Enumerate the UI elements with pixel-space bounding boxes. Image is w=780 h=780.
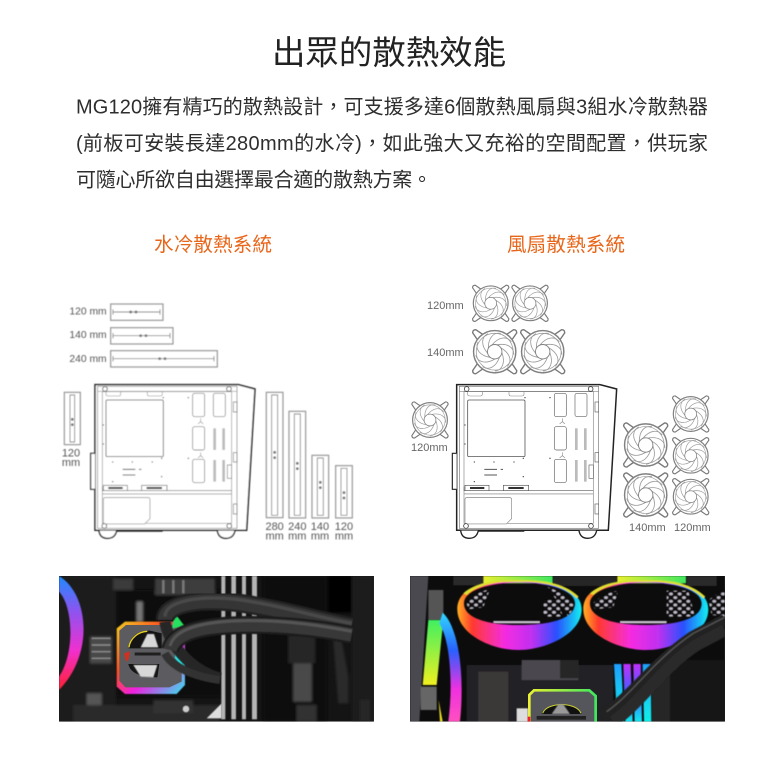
radiator size labels: 240 mm	[69, 354, 107, 365]
fan size labels: 120mm	[427, 300, 464, 312]
radiator size labels: 280	[265, 521, 284, 533]
chassis and motherboard background	[410, 576, 725, 722]
right fan hex mesh	[593, 591, 695, 623]
fans: 140mm front	[624, 423, 668, 517]
right RGB fan ring	[583, 576, 708, 650]
radiator size labels: 120 mm	[69, 307, 107, 318]
left RGB fan ring	[59, 576, 84, 690]
fans: 120mm top	[473, 285, 548, 321]
fan size labels: 140mm	[629, 522, 666, 534]
radiator size labels: mm	[311, 530, 329, 542]
fan size labels: 120mm	[411, 442, 448, 454]
left RGB fan ring	[457, 576, 582, 650]
radiators: side and front mount	[64, 392, 352, 518]
case outline: liquid cooling	[91, 385, 255, 538]
intro paragraph	[76, 96, 708, 192]
photo: liquid cooler pump block	[59, 576, 374, 722]
radiator size labels: 120	[62, 448, 80, 460]
radiator size labels: mm	[288, 530, 306, 542]
radiator sizes: top mount	[64, 304, 352, 518]
radiator size labels: mm	[335, 530, 353, 542]
motherboard background	[59, 576, 374, 722]
left fan hex mesh	[467, 587, 575, 623]
photo: RGB fans and pump	[410, 576, 725, 722]
heading: fan cooling: 風扇散熱系統	[507, 234, 625, 256]
diagram: liquid cooling layout	[62, 304, 353, 542]
radiator size labels: 120	[335, 521, 353, 533]
radiator size labels: mm	[265, 530, 284, 542]
RAM RGB sticks	[614, 664, 651, 722]
fans: 120mm front	[673, 396, 709, 515]
radiator size labels: 240	[288, 521, 306, 533]
radiator size labels: 140	[311, 521, 329, 533]
intro paragraph: (前板可安裝長達280mm的水冷)，如此強大又充裕的空間配置，供玩家	[76, 132, 708, 155]
radiator size labels	[62, 307, 353, 542]
radiator size labels: 140 mm	[69, 330, 107, 341]
fan: 120mm rear	[412, 402, 448, 438]
fan size labels: 120mm	[674, 522, 711, 534]
diagram: fan cooling layout	[411, 285, 711, 538]
pump block	[517, 689, 597, 722]
fans: 140mm top	[473, 330, 565, 374]
case outline: fan cooling	[452, 385, 617, 538]
title: 出眾的散熱效能	[272, 34, 506, 71]
side RGB fan	[423, 613, 462, 722]
pump block	[117, 613, 185, 694]
radiator size labels: mm	[62, 457, 80, 469]
intro paragraph: 可隨心所欲自由選擇最合適的散熱方案。	[76, 168, 432, 192]
coolant tubes	[165, 598, 352, 680]
RAM sticks	[221, 576, 257, 719]
fan size labels: 140mm	[427, 347, 464, 359]
heading: liquid cooling: 水冷散熱系統	[154, 234, 272, 256]
intro paragraph: MG120擁有精巧的散熱設計，可支援多達6個散熱風扇與3組水冷散熱器	[76, 96, 708, 118]
coolant tubes	[602, 617, 725, 722]
fan size labels	[411, 300, 711, 534]
board highlights	[92, 580, 222, 718]
